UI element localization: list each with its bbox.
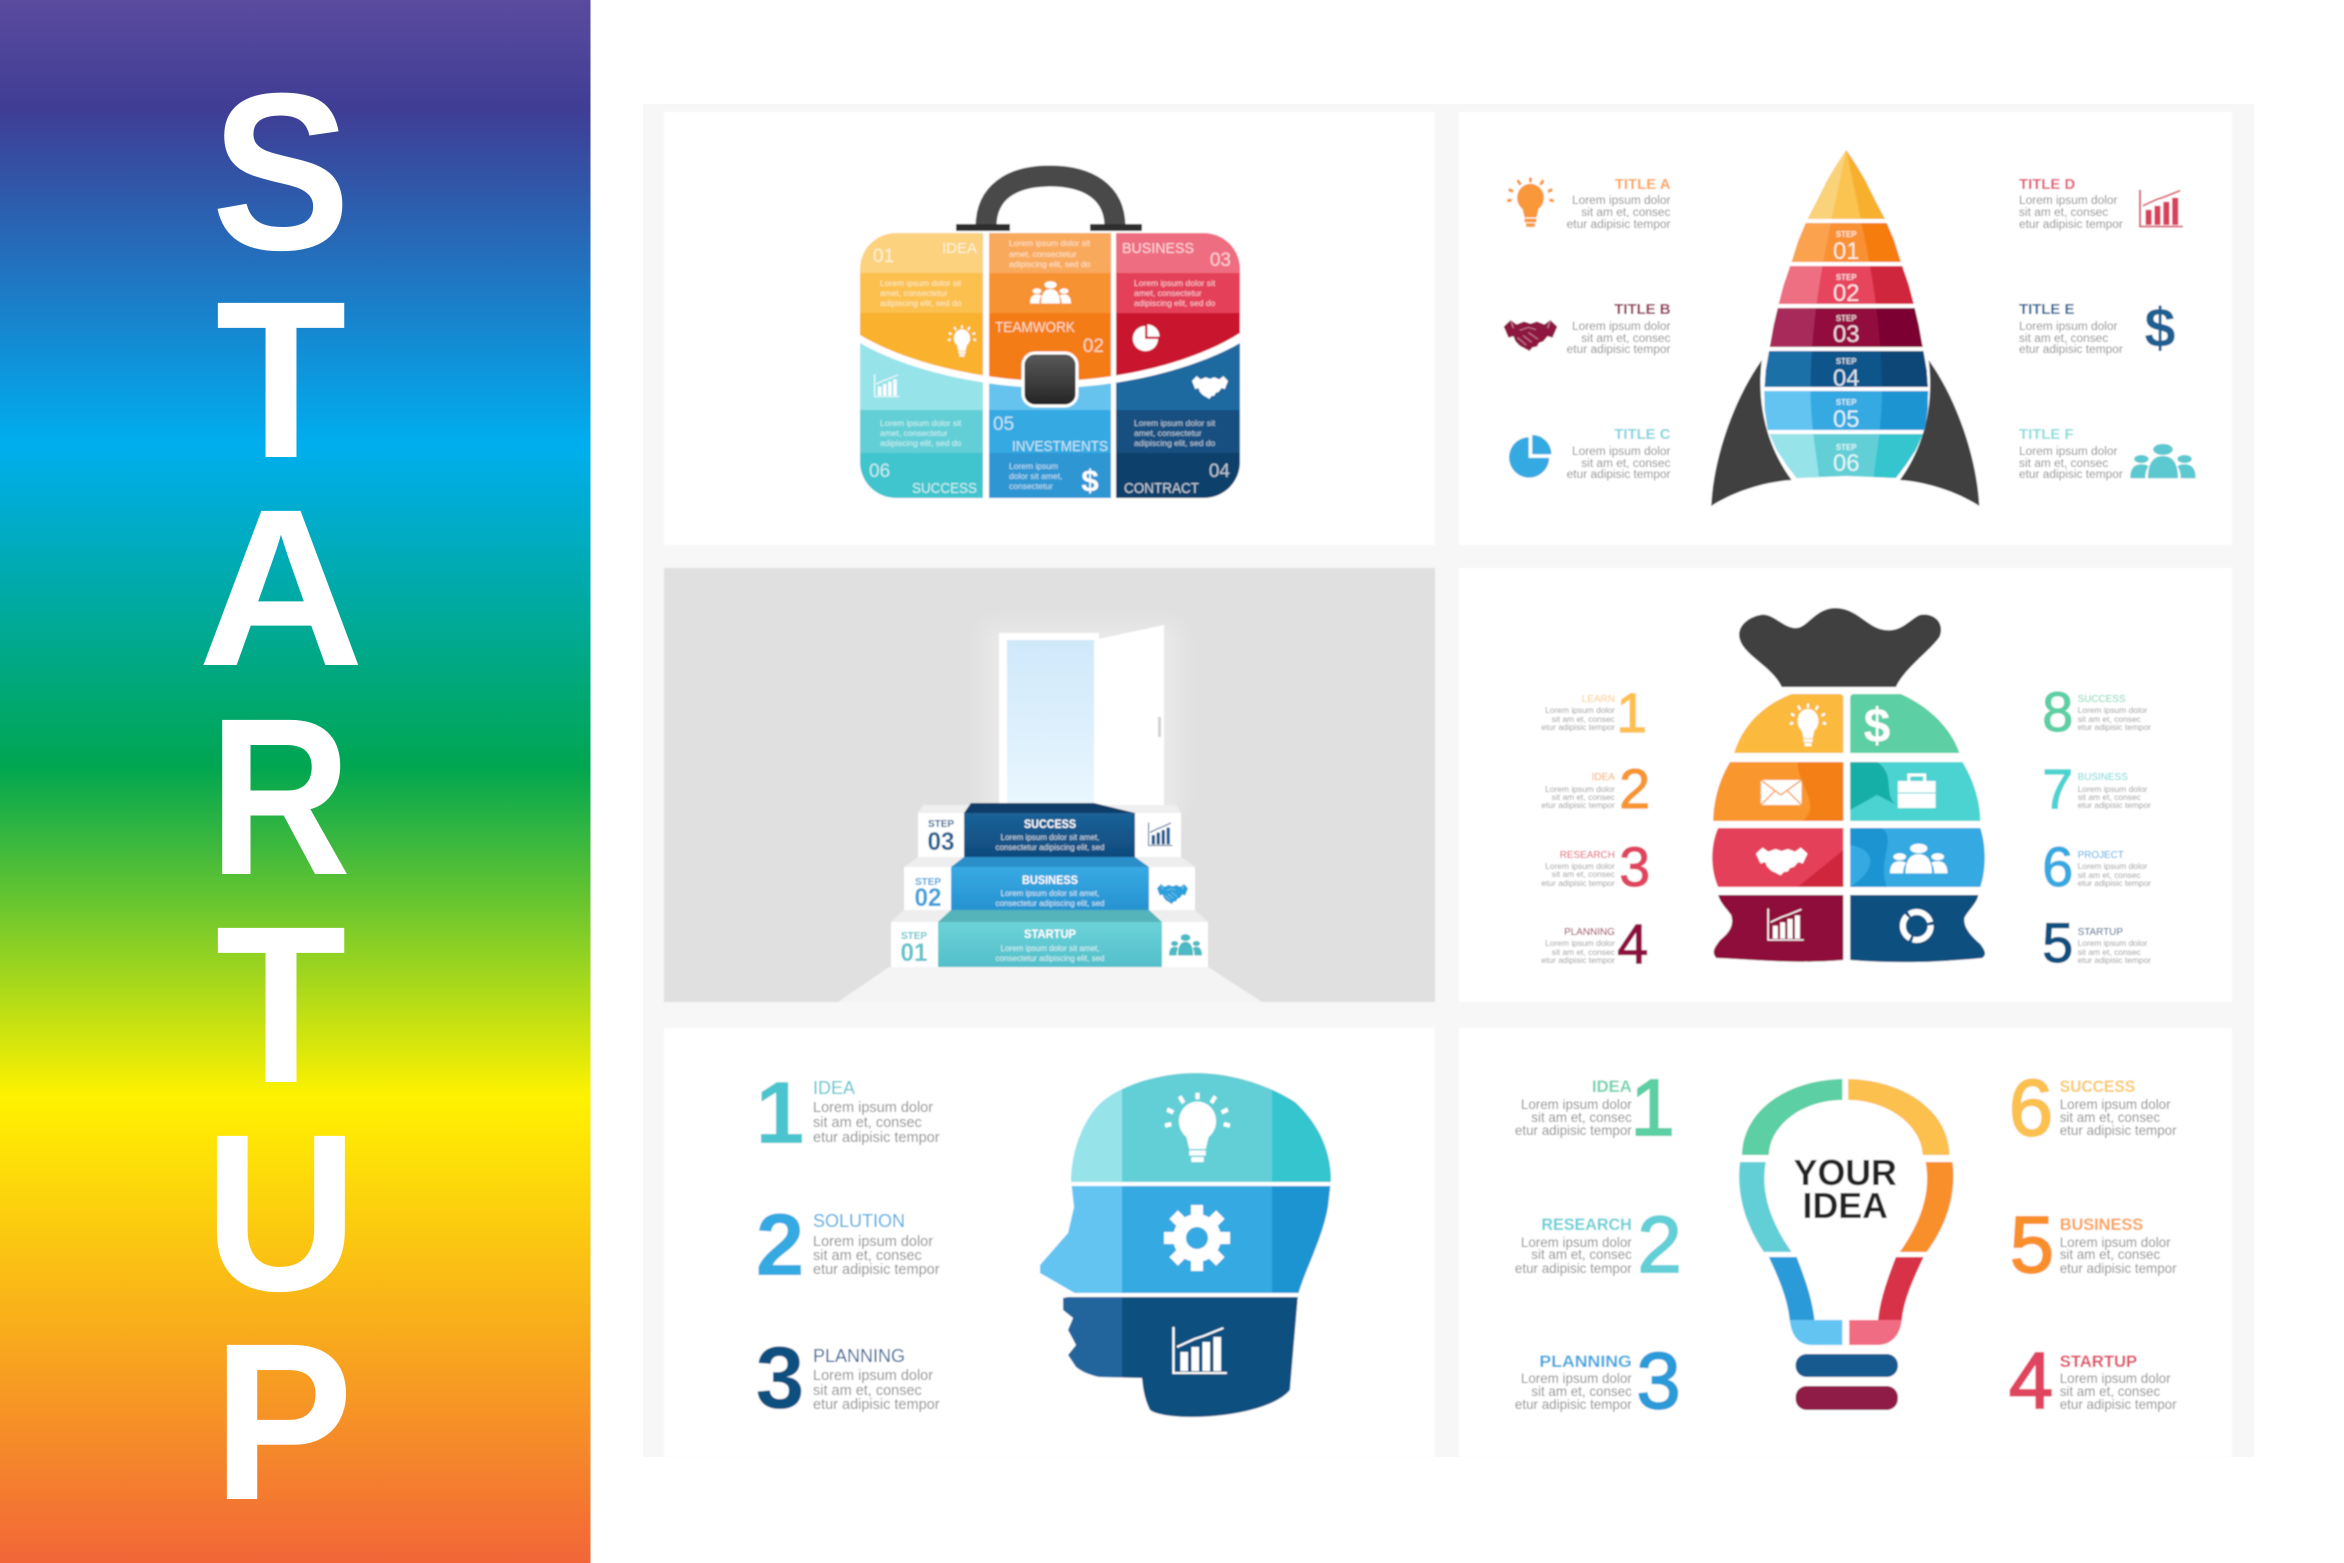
item 5 business: 5 xyxy=(2010,1200,2054,1289)
block: business 03: BUSINESS xyxy=(1122,240,1194,257)
item 1 learn: sit am et, consec xyxy=(1552,714,1615,724)
block: investments 05: INVESTMENTS xyxy=(1012,438,1108,455)
block: title E: etur adipisic tempor xyxy=(2019,342,2123,356)
block: title F xyxy=(2019,426,2123,481)
item 1 idea: etur adipisic tempor xyxy=(1515,1123,1632,1138)
block: investments 05: Lorem ipsum xyxy=(1009,461,1058,471)
icon: bars navy xyxy=(1149,822,1172,846)
item: planning: sit am et, consec xyxy=(813,1383,922,1399)
item 7 business: etur adipisic tempor xyxy=(2078,800,2151,810)
block: idea 01: IDEA xyxy=(942,240,977,257)
item 6 success: SUCCESS xyxy=(2060,1077,2135,1096)
block: title A: TITLE A xyxy=(1615,176,1671,193)
item 5 startup: STARTUP xyxy=(2078,927,2123,938)
icon: head bulb xyxy=(1165,1093,1230,1162)
panel: light bulb infographic xyxy=(1459,1028,2232,1457)
block: title E: Lorem ipsum dolor xyxy=(2019,319,2118,333)
item 6 project xyxy=(2042,835,2151,898)
bag row 1 xyxy=(1734,694,1959,753)
bulb segment: red xyxy=(1849,1257,1924,1345)
bulb segment: blue xyxy=(1769,1257,1842,1345)
icon: red bars xyxy=(2140,190,2183,227)
block: idea 01: 01 xyxy=(873,246,894,267)
item 3 planning xyxy=(1515,1336,1681,1425)
item 7 business: BUSINESS xyxy=(2078,772,2128,783)
block: title C: sit am et, consec xyxy=(1581,456,1671,470)
block: business 03: Lorem ipsum dolor sit xyxy=(1134,278,1216,288)
item 1 learn xyxy=(1541,681,1647,744)
item 2 research: etur adipisic tempor xyxy=(1515,1261,1632,1276)
block: business 03: 03 xyxy=(1210,250,1231,271)
item: planning: 3 xyxy=(756,1328,804,1427)
rocket step labels: STEP xyxy=(1836,398,1857,407)
title: STARTUP vertical letters: U xyxy=(204,1088,358,1338)
item 8 success: SUCCESS xyxy=(2078,694,2126,705)
head silhouette bands xyxy=(1030,1070,1342,1422)
block: title C: etur adipisic tempor xyxy=(1567,467,1671,481)
item 6 success: Lorem ipsum dolor xyxy=(2060,1097,2171,1112)
icon: open door xyxy=(999,625,1164,815)
block: teamwork 02: 02 xyxy=(1083,336,1104,357)
icon: teal people xyxy=(2130,444,2196,478)
rocket step labels: STEP xyxy=(1836,230,1857,239)
item: idea: sit am et, consec xyxy=(813,1115,922,1131)
item 2 idea: sit am et, consec xyxy=(1552,792,1615,802)
block: title E: TITLE E xyxy=(2019,301,2074,318)
block: contract 04: amet, consectetur xyxy=(1134,428,1202,438)
item 6 success: etur adipisic tempor xyxy=(2060,1123,2177,1138)
item 2 idea: 2 xyxy=(1619,757,1650,820)
icon: bag knot xyxy=(1739,608,1941,687)
rocket step labels: STEP xyxy=(1836,273,1857,282)
icon: orange bulb xyxy=(1507,178,1554,227)
item 5 business: Lorem ipsum dolor xyxy=(2060,1235,2171,1250)
block: title A: Lorem ipsum dolor xyxy=(1572,193,1671,207)
item 2 research: sit am et, consec xyxy=(1531,1247,1632,1262)
item 5 business: etur adipisic tempor xyxy=(2060,1261,2177,1276)
item 3 research: RESEARCH xyxy=(1560,850,1615,861)
item 8 success: 8 xyxy=(2042,680,2073,743)
icon: bag bars xyxy=(1768,909,1804,940)
item 6 project: 6 xyxy=(2042,835,2073,898)
icon: briefcase clasp xyxy=(1023,353,1077,406)
block: title C: Lorem ipsum dolor xyxy=(1572,444,1671,458)
item 2 idea: IDEA xyxy=(1592,772,1615,783)
panel: money bag infographic xyxy=(1459,568,2232,1002)
bag row 2 xyxy=(1713,762,1980,821)
block: title D: TITLE D xyxy=(2019,176,2075,193)
item 8 success: etur adipisic tempor xyxy=(2078,722,2151,732)
item: idea: IDEA xyxy=(813,1078,855,1098)
block: title F: TITLE F xyxy=(2019,426,2074,443)
title: STARTUP vertical letters: T xyxy=(215,880,347,1130)
item 6 project: etur adipisic tempor xyxy=(2078,878,2151,888)
bulb segment: teal xyxy=(1739,1162,1792,1252)
block: teamwork 02: amet, consectetur xyxy=(1009,249,1077,259)
title: STARTUP vertical letters: P xyxy=(213,1297,353,1547)
rocket step labels: STEP xyxy=(1836,314,1857,323)
block: contract 04: CONTRACT xyxy=(1124,480,1199,497)
block: title A: sit am et, consec xyxy=(1581,205,1671,219)
bulb segment: green xyxy=(1742,1079,1842,1155)
title: STARTUP vertical letters: A xyxy=(198,463,364,713)
icon: handshake white xyxy=(1192,376,1228,399)
block: title E xyxy=(2019,301,2123,356)
stair blocks xyxy=(891,805,1208,967)
item 4 startup xyxy=(2009,1336,2177,1425)
block: idea 01: adipiscing elit, sed do xyxy=(880,298,962,308)
block: contract 04: adipiscing elit, sed do xyxy=(1134,438,1216,448)
item 3 research xyxy=(1541,835,1650,898)
item 1 idea: sit am et, consec xyxy=(1531,1110,1632,1125)
block: title A xyxy=(1567,176,1671,231)
rocket contents xyxy=(1504,150,2196,506)
panel: staircase infographic xyxy=(664,568,1435,1002)
item 1 learn: 1 xyxy=(1616,681,1647,744)
icon: people white xyxy=(1030,281,1071,304)
step 02 label: STEP xyxy=(915,877,941,888)
item 2 research: 2 xyxy=(1637,1200,1682,1289)
item 8 success: Lorem ipsum dolor xyxy=(2078,705,2148,715)
stair carpet step 3: Lorem ipsum dolor sit amet, xyxy=(1001,833,1099,842)
block: success 06: Lorem ipsum dolor sit xyxy=(880,418,962,428)
item 3 research: Lorem ipsum dolor xyxy=(1545,861,1615,871)
stair carpet step 1: consectetur adipiscing elit, sed xyxy=(996,954,1104,963)
icon: briefcase white xyxy=(1898,775,1936,808)
block: contract 04 xyxy=(1124,418,1230,497)
step 01 label: 01 xyxy=(900,939,928,967)
item 5 startup: Lorem ipsum dolor xyxy=(2078,938,2148,948)
icon: handshake maroon xyxy=(1504,320,1557,351)
block: investments 05 xyxy=(993,414,1108,498)
block: title F: sit am et, consec xyxy=(2019,456,2108,470)
item 7 business: Lorem ipsum dolor xyxy=(2078,784,2148,794)
item 5 business: BUSINESS xyxy=(2060,1215,2143,1234)
item 3 planning: Lorem ipsum dolor xyxy=(1521,1371,1632,1386)
item 4 planning xyxy=(1541,912,1648,975)
item 3 planning: 3 xyxy=(1636,1336,1681,1425)
item: solution: etur adipisic tempor xyxy=(813,1262,940,1278)
step 03 label: STEP xyxy=(928,819,954,830)
icon: bag bulb xyxy=(1790,703,1826,746)
panel: head infographic xyxy=(757,1072,1332,1418)
icon: bulb white xyxy=(948,325,976,357)
block: title D xyxy=(2019,176,2123,231)
item: planning: PLANNING xyxy=(813,1346,905,1366)
item: solution: SOLUTION xyxy=(813,1211,905,1231)
item: planning: etur adipisic tempor xyxy=(813,1397,940,1413)
item 5 business xyxy=(2010,1200,2177,1289)
rocket step labels: STEP xyxy=(1836,443,1857,452)
block: success 06: adipiscing elit, sed do xyxy=(880,438,962,448)
item: planning xyxy=(756,1328,940,1427)
icon: envelope xyxy=(1761,780,1802,805)
block: idea 01: Lorem ipsum dolor sit xyxy=(880,278,962,288)
item 4 planning: Lorem ipsum dolor xyxy=(1545,938,1615,948)
block: investments 05: 05 xyxy=(993,414,1014,435)
item 1 idea: Lorem ipsum dolor xyxy=(1521,1097,1632,1112)
stair carpet step 1 xyxy=(938,910,1162,967)
item 6 project: Lorem ipsum dolor xyxy=(2078,861,2148,871)
block: business 03: adipiscing elit, sed do xyxy=(1134,298,1216,308)
icon: briefcase handle xyxy=(956,176,1142,231)
block: investments 05: dolor sit amet, xyxy=(1009,471,1062,481)
stair carpet step 3: consectetur adipiscing elit, sed xyxy=(996,843,1104,852)
icon: blue pie xyxy=(1509,435,1551,478)
block: investments 05: $ xyxy=(1081,463,1099,498)
step 03 label: 03 xyxy=(928,828,954,856)
item: idea: Lorem ipsum dolor xyxy=(813,1100,933,1116)
panel: briefcase infographic xyxy=(859,165,1241,499)
block: idea 01 xyxy=(873,240,977,308)
bulb segment: orange xyxy=(1900,1162,1953,1252)
block: teamwork 02: TEAMWORK xyxy=(995,319,1075,336)
block: business 03 xyxy=(1122,240,1231,308)
bulb base bars xyxy=(1796,1354,1898,1410)
item: planning: Lorem ipsum dolor xyxy=(813,1368,933,1384)
step 02 label: 02 xyxy=(914,884,942,912)
floor xyxy=(838,967,1262,1002)
block: title D: sit am et, consec xyxy=(2019,205,2108,219)
icon: bars white xyxy=(875,374,899,397)
item 1 idea: IDEA xyxy=(1592,1077,1632,1096)
rocket step labels: 03 xyxy=(1833,321,1859,348)
block: title B: Lorem ipsum dolor xyxy=(1572,319,1671,333)
money bag contents xyxy=(1541,608,2151,975)
item 4 startup: etur adipisic tempor xyxy=(2060,1397,2177,1412)
icon: rocket fins xyxy=(1711,360,1979,506)
item 7 business: 7 xyxy=(2042,757,2073,820)
item 1 learn: Lorem ipsum dolor xyxy=(1545,705,1615,715)
rocket step labels: 04 xyxy=(1833,365,1859,392)
stair carpet step 3: SUCCESS xyxy=(1024,817,1076,831)
item 5 startup: sit am et, consec xyxy=(2078,947,2141,957)
item: idea: 1 xyxy=(756,1063,804,1162)
light bulb contents xyxy=(1515,1063,2177,1425)
item 1 idea xyxy=(1515,1063,1675,1152)
block: teamwork 02: Lorem ipsum dolor sit xyxy=(1009,238,1091,248)
item 4 planning: etur adipisic tempor xyxy=(1541,955,1615,965)
stair carpet step 2: consectetur adipiscing elit, sed xyxy=(996,899,1104,908)
stair carpet step 2 xyxy=(951,857,1149,910)
block: contract 04: 04 xyxy=(1209,461,1230,482)
stair carpet step 1: Lorem ipsum dolor sit amet, xyxy=(1001,944,1099,953)
stair carpet step 1: STARTUP xyxy=(1024,927,1076,941)
item 3 research: etur adipisic tempor xyxy=(1541,878,1615,888)
block: teamwork 02: adipiscing elit, sed do xyxy=(1009,259,1091,269)
item 6 project: sit am et, consec xyxy=(2078,870,2141,880)
block: business 03: amet, consectetur xyxy=(1134,288,1202,298)
title: STARTUP vertical letters: S xyxy=(212,46,350,297)
block: title E: sit am et, consec xyxy=(2019,331,2108,345)
block: title C xyxy=(1567,426,1671,481)
item: idea xyxy=(756,1063,940,1162)
panel: rainbow title band xyxy=(0,0,590,1563)
icon: head gear xyxy=(1164,1205,1230,1271)
block: title F: Lorem ipsum dolor xyxy=(2019,444,2118,458)
item 5 startup xyxy=(2042,911,2151,974)
item 2 research xyxy=(1515,1200,1682,1289)
title: STARTUP vertical letters: R xyxy=(209,671,351,922)
briefcase body segments xyxy=(860,233,1240,498)
block: idea 01: amet, consectetur xyxy=(880,288,948,298)
rocket step labels: 06 xyxy=(1833,450,1859,477)
block: title A: etur adipisic tempor xyxy=(1567,217,1671,231)
block: title B xyxy=(1567,301,1671,356)
item: solution: sit am et, consec xyxy=(813,1248,922,1264)
bag row 3 xyxy=(1712,828,1985,887)
item 1 learn: etur adipisic tempor xyxy=(1541,722,1615,732)
item 3 planning: PLANNING xyxy=(1539,1352,1632,1371)
bulb centre text: IDEA xyxy=(1803,1186,1888,1226)
block: success 06: SUCCESS xyxy=(912,480,977,497)
item 3 research: 3 xyxy=(1619,835,1650,898)
icon: dollar: $ xyxy=(2145,296,2175,359)
block: title C: TITLE C xyxy=(1614,426,1671,443)
item 1 idea: 1 xyxy=(1631,1063,1675,1152)
item 3 research: sit am et, consec xyxy=(1552,869,1615,879)
block: title F: etur adipisic tempor xyxy=(2019,467,2123,481)
block: title B: TITLE B xyxy=(1614,301,1671,318)
stair carpet step 2: BUSINESS xyxy=(1022,873,1078,887)
block: teamwork 02 xyxy=(995,238,1104,357)
stair carpet step 3 xyxy=(964,803,1135,857)
item 5 startup: etur adipisic tempor xyxy=(2078,955,2151,965)
block: investments 05: consectetur xyxy=(1009,481,1053,491)
icon: bag dollar: $ xyxy=(1864,700,1890,753)
bulb centre text: YOUR xyxy=(1794,1153,1897,1193)
item 4 planning: PLANNING xyxy=(1564,927,1615,938)
item 1 learn: LEARN xyxy=(1582,694,1615,705)
item 4 planning: sit am et, consec xyxy=(1552,947,1615,957)
item 4 startup: 4 xyxy=(2009,1336,2053,1425)
item 2 idea xyxy=(1541,757,1650,820)
icon: handshake blue xyxy=(1157,884,1188,904)
item 7 business xyxy=(2042,757,2151,820)
title: STARTUP vertical letters: T xyxy=(215,255,347,505)
item 2 research: RESEARCH xyxy=(1541,1215,1632,1234)
block: title B: sit am et, consec xyxy=(1581,331,1671,345)
item: solution: 2 xyxy=(756,1195,804,1294)
item 3 planning: sit am et, consec xyxy=(1531,1384,1632,1399)
rocket step labels xyxy=(1833,230,1859,477)
item 2 research: Lorem ipsum dolor xyxy=(1521,1235,1632,1250)
item 8 success: sit am et, consec xyxy=(2078,714,2141,724)
item 5 business: sit am et, consec xyxy=(2060,1247,2160,1262)
rocket body bands xyxy=(1763,150,1930,479)
icon: pie white xyxy=(1133,325,1159,351)
step 01 label: STEP xyxy=(901,931,927,942)
rocket step labels: 02 xyxy=(1833,280,1859,307)
item 4 planning: 4 xyxy=(1617,912,1648,975)
block: success 06 xyxy=(869,418,977,497)
block: success 06: 06 xyxy=(869,461,890,482)
icon: ring xyxy=(1903,912,1931,940)
panel: rocket infographic xyxy=(1503,150,2196,506)
rocket step labels: 01 xyxy=(1833,238,1859,265)
title: STARTUP vertical letters xyxy=(198,46,364,1547)
block: success 06: amet, consectetur xyxy=(880,428,948,438)
icon: bag handshake xyxy=(1756,848,1808,875)
item 6 success xyxy=(2009,1063,2177,1152)
item 8 success xyxy=(2042,680,2151,743)
item 6 success: 6 xyxy=(2009,1063,2053,1152)
bulb segment: yellow xyxy=(1848,1079,1950,1155)
panel: template gallery backdrop xyxy=(643,104,2254,1457)
bulb centre text xyxy=(1794,1153,1897,1226)
item 2 idea: Lorem ipsum dolor xyxy=(1545,784,1615,794)
item: idea: etur adipisic tempor xyxy=(813,1130,940,1146)
block: contract 04: Lorem ipsum dolor sit xyxy=(1134,418,1216,428)
item 5 startup: 5 xyxy=(2042,911,2073,974)
icon: head bars xyxy=(1173,1327,1227,1373)
rocket step labels: STEP xyxy=(1836,357,1857,366)
stair carpet step 2: Lorem ipsum dolor sit amet, xyxy=(1001,889,1099,898)
item 4 startup: Lorem ipsum dolor xyxy=(2060,1371,2171,1386)
block: title D: etur adipisic tempor xyxy=(2019,217,2123,231)
item 3 planning: etur adipisic tempor xyxy=(1515,1397,1632,1412)
icon: bag people xyxy=(1890,844,1948,873)
block: title B: etur adipisic tempor xyxy=(1567,342,1671,356)
item 2 idea: etur adipisic tempor xyxy=(1541,800,1615,810)
block: title D: Lorem ipsum dolor xyxy=(2019,193,2118,207)
rocket step labels: 05 xyxy=(1833,406,1859,433)
item 4 startup: STARTUP xyxy=(2060,1352,2137,1371)
gallery of six blurred template thumbnails xyxy=(664,112,2232,1457)
item: solution: Lorem ipsum dolor xyxy=(813,1234,933,1250)
item 7 business: sit am et, consec xyxy=(2078,792,2141,802)
bag row 4 xyxy=(1714,895,1985,962)
icon: people teal xyxy=(1169,934,1202,956)
item 6 project: PROJECT xyxy=(2078,850,2124,861)
item 6 success: sit am et, consec xyxy=(2060,1110,2160,1125)
item: solution xyxy=(756,1195,940,1294)
item 4 startup: sit am et, consec xyxy=(2060,1384,2160,1399)
